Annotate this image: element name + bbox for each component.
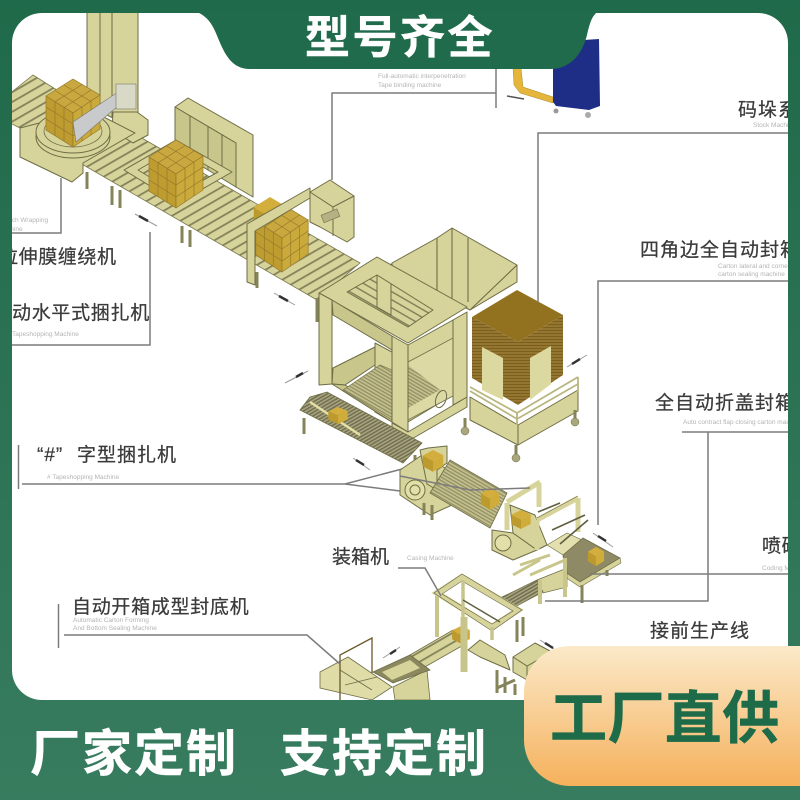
leader lines [10, 62, 790, 664]
label: horizontal strapper: 动水平式捆扎机 [12, 302, 150, 324]
caption: custom support: 支持定制 [280, 726, 488, 782]
packed cartons [310, 402, 360, 435]
heading tab [190, 10, 600, 69]
label: four corner sealer: Carton lateral and corner [718, 263, 791, 270]
machine: horizontal strapper [124, 98, 253, 208]
packing section [500, 555, 567, 608]
badge: direct from factory: 工厂直供 [550, 687, 780, 751]
label: cross strapper: # Tapeshopping Machine [47, 474, 120, 481]
label: full automatic binding: Tape binding machine [378, 82, 442, 89]
label: carton former: Automatic Carton Forming [73, 617, 149, 624]
conveyor: coding station [563, 538, 620, 582]
label: full automatic binding [378, 73, 466, 89]
carton on lower run [452, 626, 470, 644]
label: horizontal strapper: Tapeshopping Machine [12, 331, 79, 338]
label: cross strapper [37, 444, 177, 481]
conveyor: lower gantry run [300, 392, 422, 463]
conveyor: lower run [410, 630, 467, 668]
label: carton former [72, 596, 249, 632]
machine: stacking gantry [319, 228, 517, 440]
conveyor: main upper run [80, 133, 360, 300]
machine: carton former [320, 638, 430, 700]
conveyor frame edge [565, 558, 621, 587]
label: carton former: And Bottom Sealing Machine [73, 625, 157, 632]
label: full automatic binding: Full-automatic interpenetration [378, 73, 466, 80]
label: carton former: 自动开箱成型封底机 [72, 596, 249, 618]
label: case packer [332, 546, 454, 568]
post: case packer [460, 617, 468, 672]
label: coding machine [762, 535, 800, 572]
machine: case packer frame [434, 574, 522, 640]
label: flap closing sealer: Auto contract flap closing carton machine [683, 419, 800, 426]
coding legs [517, 570, 607, 642]
machine: automatic strapper [247, 180, 354, 285]
label: stretch film wrapper [0, 217, 117, 268]
carton on coding station [588, 547, 604, 566]
conveyor: middle run [430, 460, 507, 528]
badge: direct from factory [524, 646, 800, 786]
conveyor: infeed [8, 75, 60, 130]
label: flap closing sealer [655, 392, 800, 426]
heading: model range: 型号齐全 [305, 12, 495, 63]
label: cross strapper: “#” [37, 445, 63, 466]
label: connect to line: 接前生产线 [650, 620, 750, 642]
lower gantry legs [304, 418, 415, 472]
label: case packer: 装箱机 [332, 546, 389, 568]
label: case packer: Casing Machine [407, 555, 454, 562]
machine: pallet table [461, 390, 579, 462]
pallet railing [470, 377, 578, 425]
conveyor legs [87, 172, 317, 322]
label: horizontal strapper [12, 302, 150, 338]
machine: stretch film wrapper [20, 10, 148, 182]
label: cross strapper: 字型捆扎机 [77, 444, 177, 466]
icon: blue strapping machine [507, 39, 600, 118]
arrow markers [135, 214, 613, 658]
carton on middle run [481, 488, 499, 510]
label: stretch film wrapper: 拉伸膜缠绕机 [0, 246, 117, 268]
machine: cross strapper [400, 446, 452, 520]
label: four corner sealer [640, 239, 800, 278]
label: four corner sealer: carton sealing machine [718, 271, 785, 278]
pallet stack [472, 290, 563, 405]
conveyor: infeed lower right [468, 640, 552, 695]
label: stacker: Stock Machine [753, 122, 796, 129]
caption: factory custom: 厂家定制 [30, 726, 238, 782]
machine: flap closing sealer [492, 482, 588, 560]
